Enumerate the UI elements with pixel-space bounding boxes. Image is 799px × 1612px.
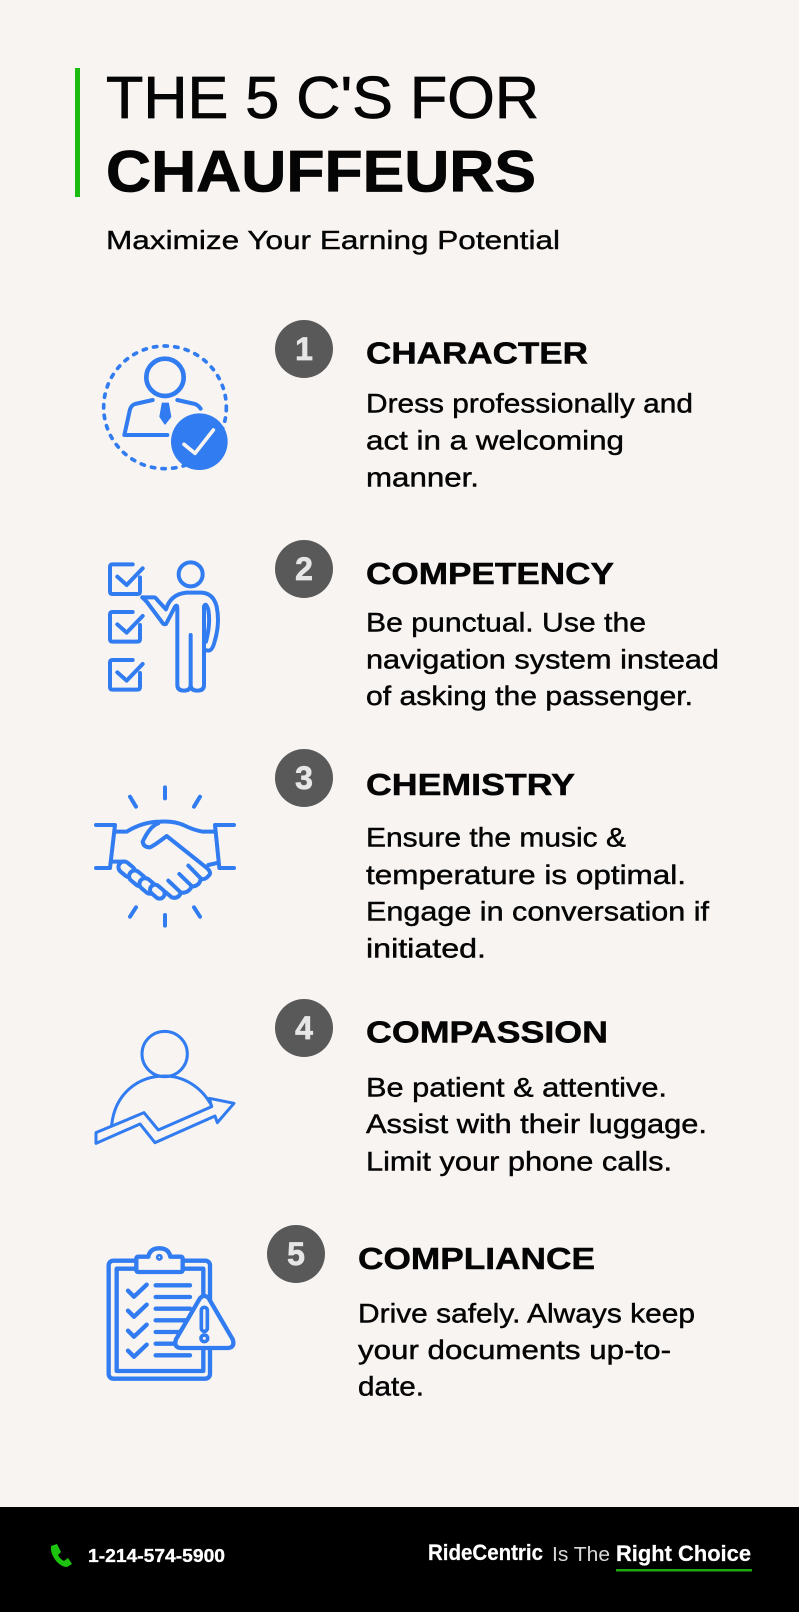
panel: chemistry [96,749,710,964]
accent bar [75,68,80,197]
description: character: Dress professionally and [366,389,693,419]
number badge 3: 3 [295,760,313,796]
title line 2: CHAUFFEURS [106,140,536,204]
heading: compliance: COMPLIANCE [358,1241,595,1276]
tagline: is the: Is The [552,1544,610,1566]
icon: person with check badge [104,346,228,470]
footer [0,1507,799,1612]
number badge 4 [275,999,333,1057]
description: character [366,389,693,492]
number badge 3 [275,749,333,807]
heading: character: CHARACTER [366,336,588,370]
icon: clipboard with warning [109,1248,233,1379]
heading: chemistry: CHEMISTRY [366,767,575,802]
description: competency: navigation system instead [366,644,719,674]
description: chemistry: temperature is optimal. [366,860,686,890]
icon: handshake [96,787,234,926]
footer background [0,1507,799,1612]
number badge 1: 1 [295,331,313,367]
number badge 5 [267,1225,325,1283]
description: compliance: your documents up-to- [358,1335,671,1365]
number badge 2 [275,540,333,598]
title line 1: THE 5 C'S FOR [106,65,539,131]
description: competency: of asking the passenger. [366,681,693,711]
phone number: 1-214-574-5900 [88,1545,225,1566]
panel: character [104,320,693,492]
panel: compliance [109,1225,695,1402]
tagline: right choice: Right Choice [616,1541,751,1566]
description: compliance [358,1298,695,1402]
description: chemistry [366,823,710,964]
panel: compassion [96,999,707,1177]
underline [616,1569,752,1572]
heading: competency: COMPETENCY [366,556,614,591]
icon: person with rising arrow [96,1031,234,1143]
description: compliance: Drive safely. Always keep [358,1298,695,1328]
brand name: RideCentric [428,1540,543,1565]
description: compliance: date. [358,1372,424,1402]
icon: person with checklist [110,562,218,691]
description: compassion: Assist with their luggage. [366,1109,707,1139]
description: competency [366,608,719,711]
description: competency: Be punctual. Use the [366,608,646,638]
number badge 1 [275,320,333,378]
description: chemistry: initiated. [366,934,486,964]
description: chemistry: Engage in conversation if [366,897,710,927]
number badge 2: 2 [295,551,313,587]
description: chemistry: Ensure the music & [366,823,626,853]
heading: compassion: COMPASSION [366,1015,608,1050]
panel: competency [110,540,719,711]
number badge 4: 4 [295,1010,313,1046]
description: character: manner. [366,462,479,492]
subtitle: Maximize Your Earning Potential [106,225,560,255]
description: compassion: Limit your phone calls. [366,1147,672,1177]
description: compassion: Be patient & attentive. [366,1073,667,1103]
number badge 5: 5 [287,1236,305,1272]
description: compassion [366,1073,707,1177]
header [75,65,560,255]
icon: phone [51,1544,72,1567]
description: character: act in a welcoming [366,425,624,455]
